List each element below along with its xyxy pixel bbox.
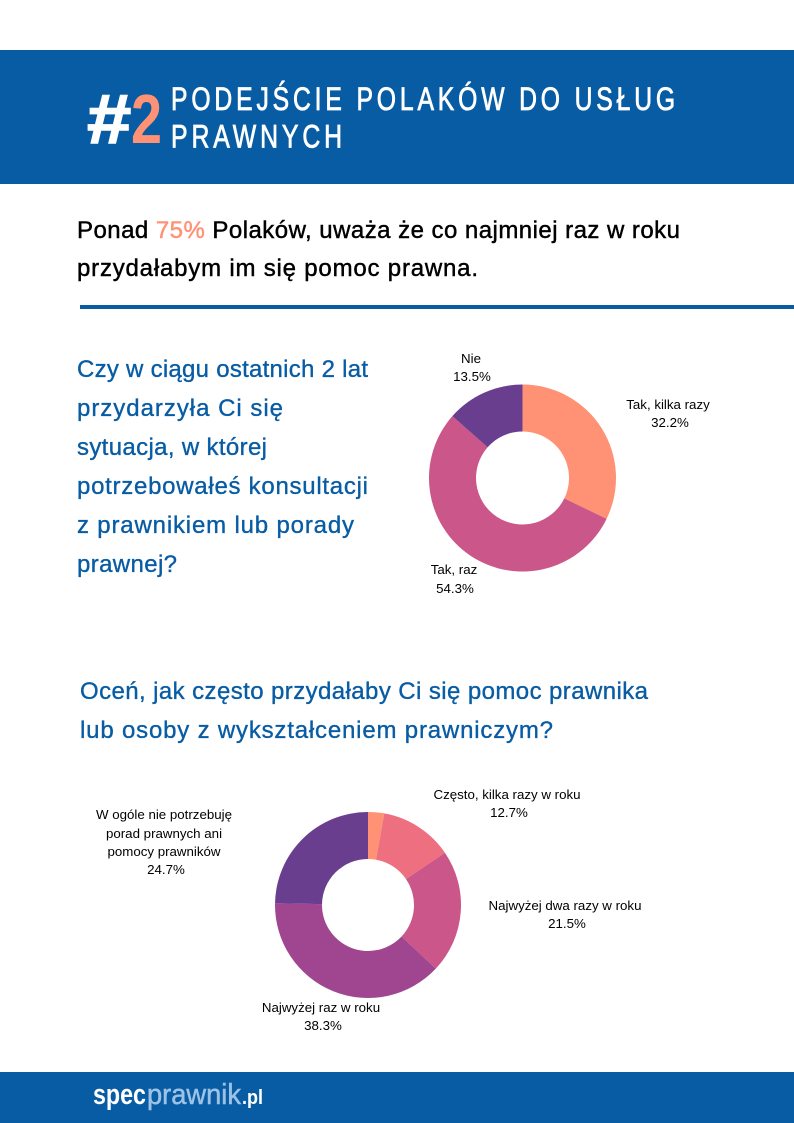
question 1 <box>77 356 368 578</box>
logo: .pl <box>242 1087 263 1109</box>
divider <box>80 305 794 309</box>
label: Tak, raz: Tak, raz <box>431 562 477 577</box>
question 1: Czy w ciągu ostatnich 2 lat <box>77 356 368 383</box>
intro text: Ponad 75% Polaków, uważa że co najmniej raz w roku <box>77 217 680 244</box>
logo: prawnik <box>147 1079 241 1111</box>
label: Tak, kilka razy: Tak, kilka razy <box>626 397 710 412</box>
label: W ogóle nie potrzebuję: porad prawnych ani <box>106 826 222 841</box>
label: Często: Często, kilka razy w roku <box>433 787 581 802</box>
label: Często: 12.7% <box>490 805 528 820</box>
question 2: lub osoby z wykształceniem prawniczym? <box>80 717 553 744</box>
question 2: Oceń, jak często przydałaby Ci się pomoc prawnika <box>80 678 649 705</box>
footer <box>0 1072 794 1123</box>
label: Najwyżej dwa razy w roku: Najwyżej dwa razy w roku <box>489 898 641 913</box>
label: Nie: Nie <box>461 351 481 366</box>
question 2 <box>80 678 649 744</box>
question 1: sytuacja, w której <box>77 434 267 461</box>
donut chart 2 <box>275 812 461 998</box>
logo <box>93 1079 263 1111</box>
label: Tak, raz: 54.3% <box>436 581 474 596</box>
title <box>171 81 679 154</box>
label: Najwyżej raz w roku: Najwyżej raz w roku <box>262 1000 380 1015</box>
question 1: prawnej? <box>77 551 177 578</box>
label: Tak, kilka razy: 32.2% <box>651 415 689 430</box>
label: W ogóle nie potrzebuję: W ogóle nie potrzebuję <box>96 807 232 822</box>
intro text: przydałabym im się pomoc prawna. <box>77 255 478 282</box>
section number: 2 <box>131 80 162 158</box>
section number <box>86 80 162 158</box>
question 1: z prawnikiem lub porady <box>77 512 354 539</box>
label: Najwyżej raz w roku: 38.3% <box>304 1018 342 1033</box>
label: W ogóle nie potrzebuję: pomocy prawników <box>107 844 221 859</box>
label: Najwyżej raz w roku <box>262 1000 380 1033</box>
logo: spec <box>93 1079 146 1111</box>
label: Często <box>433 787 581 820</box>
donut chart 1 <box>429 384 616 572</box>
label: Nie: 13.5% <box>453 369 491 384</box>
label: Nie <box>453 351 491 384</box>
title: PRAWNYCH <box>171 118 346 154</box>
header banner <box>0 50 794 184</box>
label: Najwyżej dwa razy w roku: 21.5% <box>548 916 586 931</box>
question 1: przydarzyła Ci się <box>77 395 283 422</box>
label: Tak, raz <box>431 562 477 596</box>
label: Najwyżej dwa razy w roku <box>489 898 641 931</box>
section number: # <box>86 80 130 158</box>
label: W ogóle nie potrzebuję <box>96 807 232 877</box>
intro text <box>77 217 680 282</box>
question 1: potrzebowałeś konsultacji <box>77 473 368 500</box>
label: W ogóle nie potrzebuję: 24.7% <box>147 862 185 877</box>
label: Tak, kilka razy <box>626 397 710 430</box>
